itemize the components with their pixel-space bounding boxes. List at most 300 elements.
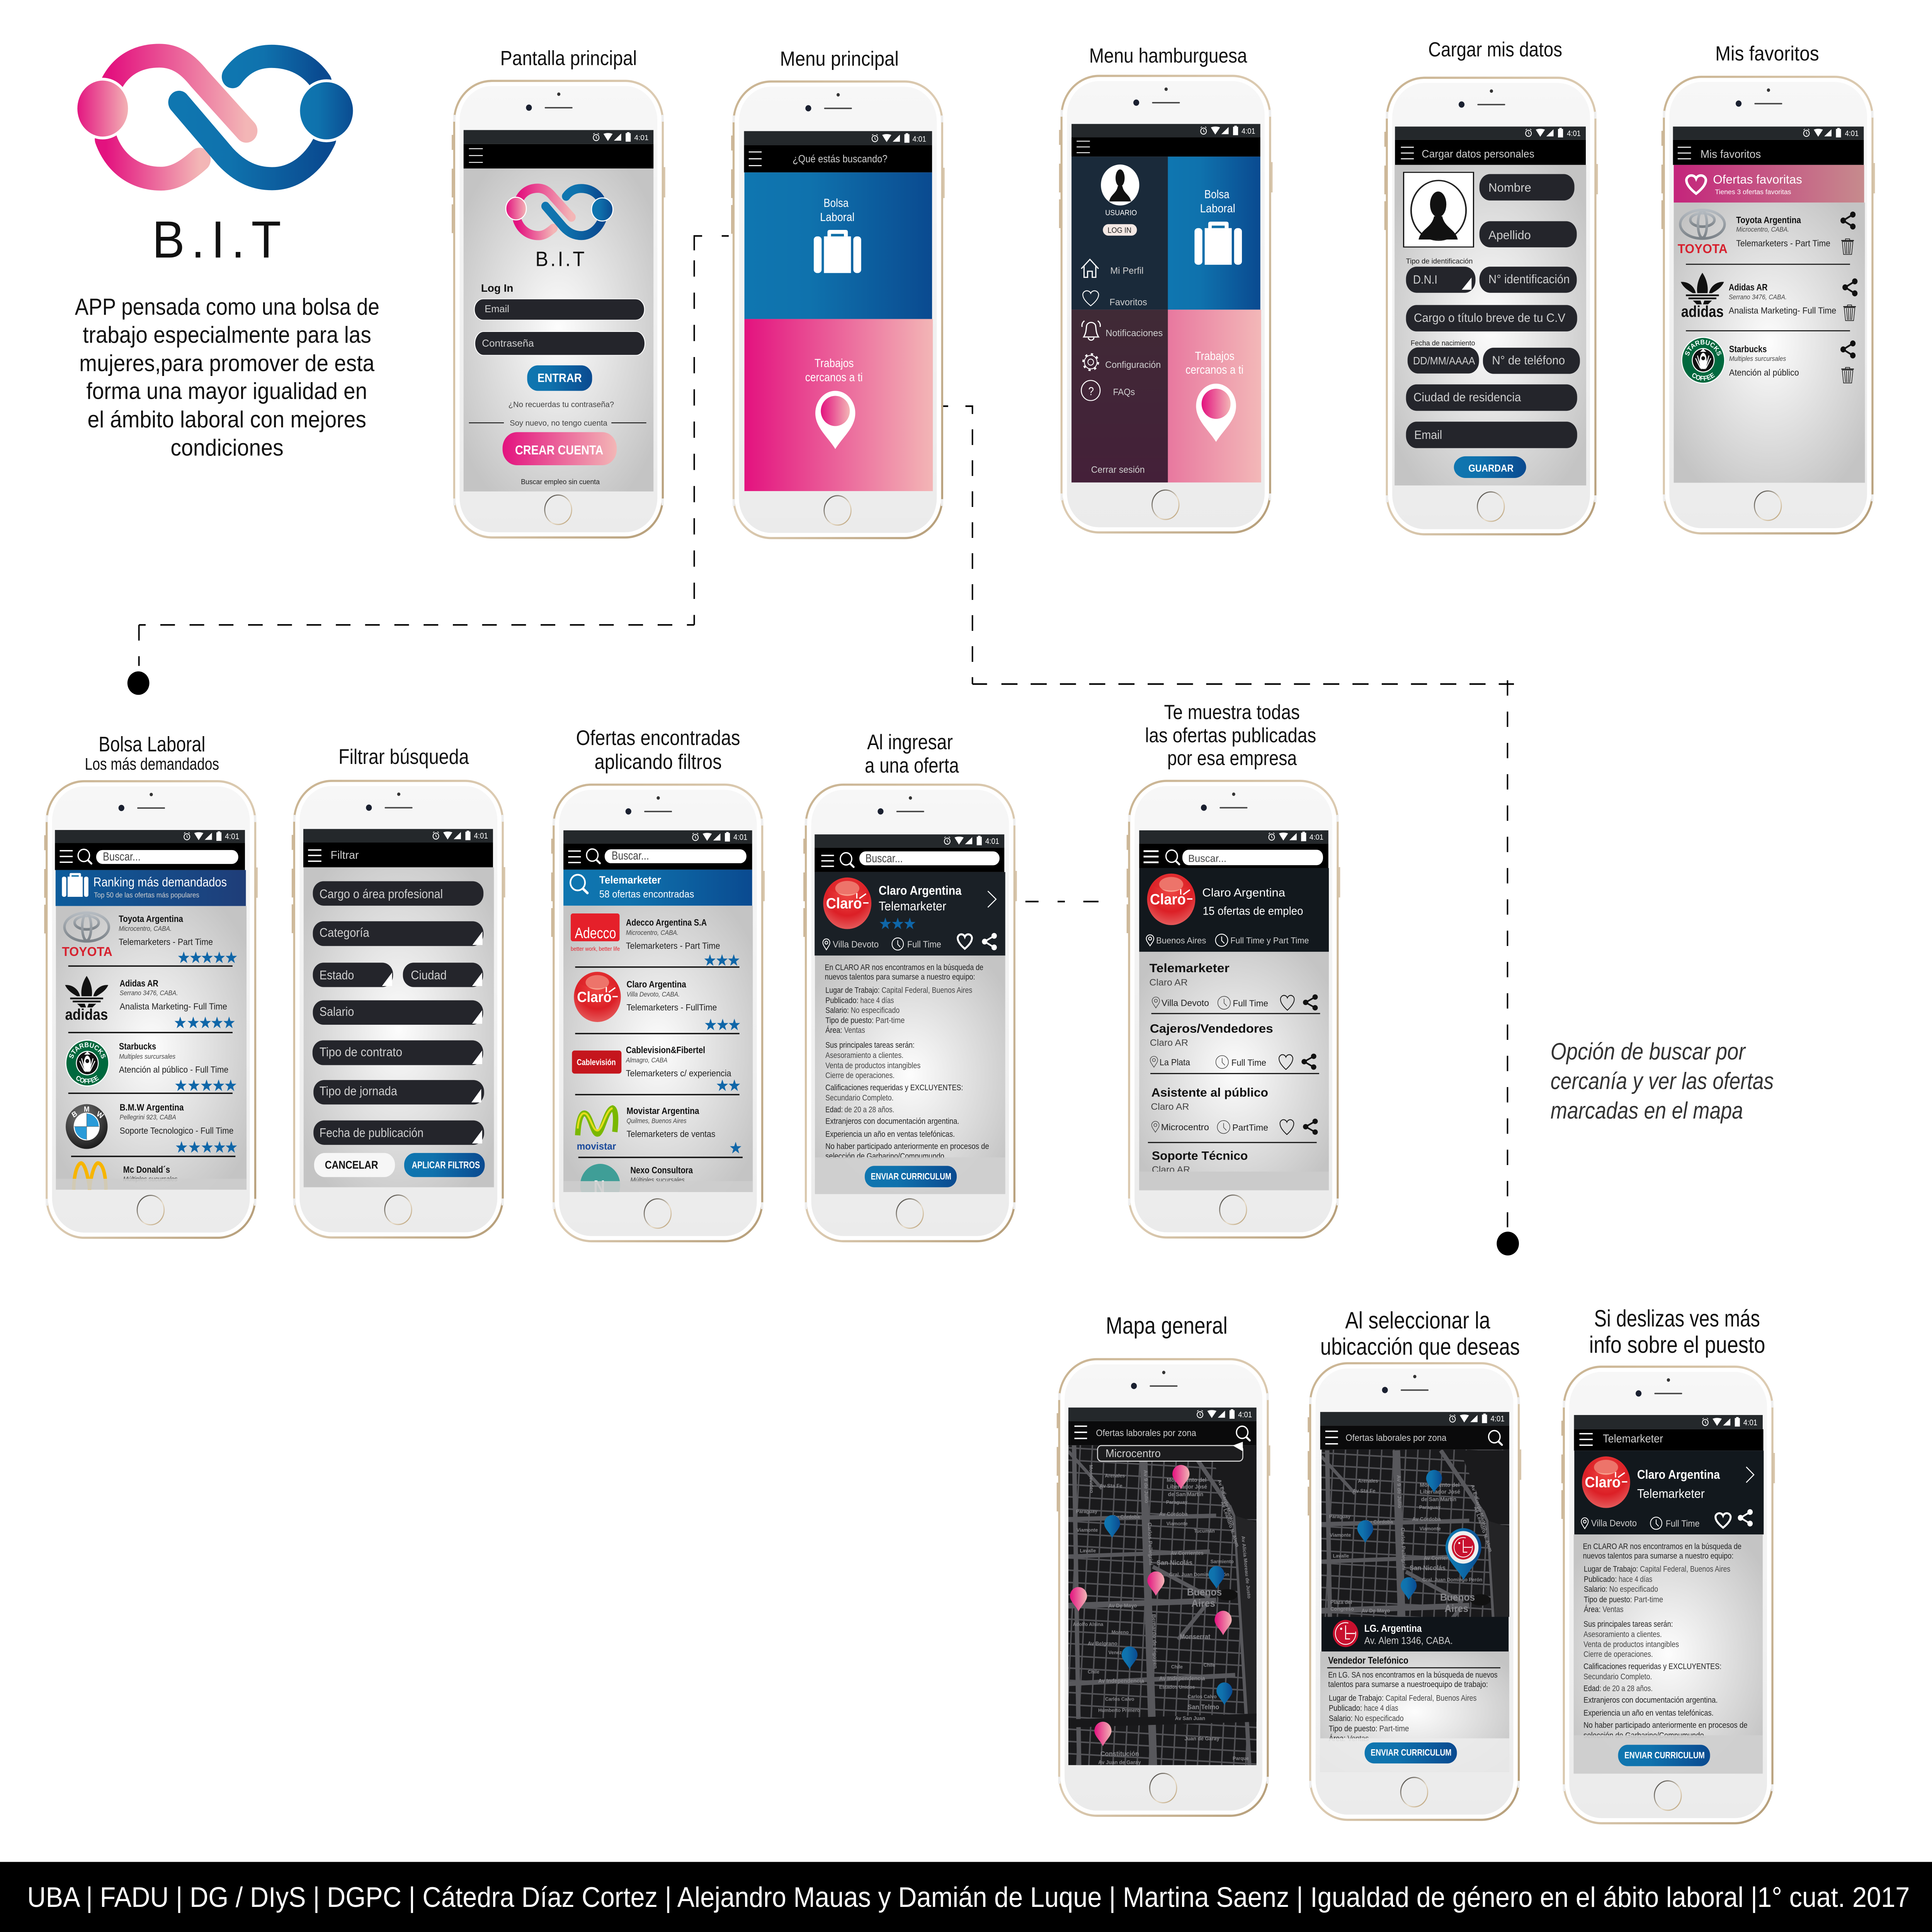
phone: Al seleccionar la ubicación: LG. Argentina <box>1364 1623 1422 1634</box>
phone: Mis favoritos: Toyota Argentina <box>1736 215 1801 225</box>
phone: Si deslizas ves más info: Extranjeros con documentación argentina. <box>1583 1696 1718 1705</box>
phone: Bolsa Laboral ranking: Ranking más demandados <box>94 875 227 889</box>
title: Ofertas encontradas: aplicando filtros <box>594 750 722 774</box>
phone: Menu hamburguesa: USUARIO <box>1105 209 1137 217</box>
phone: Al ingresar a una oferta: No haber participado anteriormente en procesos de <box>825 1142 989 1151</box>
footer bar with credits: UBA | FADU | DG / DIyS | DGPC | Cátedra Díaz Cortez | Alejandro Mauas y Damián de Luque | Martina Saenz | Igualdad de género en el ábito laboral |1° cuat. 2017 <box>27 1881 1910 1913</box>
map: microcentro streets: Adolfo Alsina <box>1073 1621 1104 1627</box>
map: microcentro streets: Aires <box>1191 1598 1215 1609</box>
intro text block: APP pensada como una bolsa de <box>75 294 379 320</box>
map: microcentro streets: Av Independencia <box>1098 1678 1145 1684</box>
phone: Al seleccionar la ubicación: Área: <box>1329 1734 1345 1743</box>
phone: Ofertas encontradas: Buscar... <box>612 849 649 862</box>
phone: Si deslizas ves más info <box>1561 1366 1775 1824</box>
phone: Bolsa Laboral ranking: B <box>70 1109 78 1119</box>
phone: Ofertas encontradas: Claro Argentina <box>626 979 686 990</box>
title: Menu principal: Menu principal <box>780 48 899 70</box>
phone: Filtrar búsqueda: CANCELAR <box>325 1158 378 1171</box>
phone: Pantalla principal: Buscar empleo sin cuenta <box>521 478 600 486</box>
arrow: dashed connector from oferta to empresa <box>1026 901 1099 903</box>
map: microcentro streets: Av Eduardo Madero <box>1217 1479 1236 1526</box>
map: zoomed area with selected LG pin: Congreso <box>1330 1606 1354 1612</box>
phone: Pantalla principal: B.I.T <box>536 247 585 270</box>
phone: Menu hamburguesa: FAQs <box>1113 387 1135 397</box>
phone: Al ingresar a una oferta: En CLARO AR nos encontramos en la búsqueda de <box>825 963 983 972</box>
phone: Al ingresar a una oferta: Publicado: <box>825 996 859 1005</box>
map: microcentro streets: Carlos Calvo <box>1105 1696 1134 1702</box>
phone: Al ingresar a una oferta: Sus principales tareas serán: <box>825 1041 915 1050</box>
phone: Pantalla principal: CREAR CUENTA <box>515 443 603 457</box>
map: microcentro streets: Libertador José <box>1167 1484 1207 1490</box>
map: microcentro streets: Paraguay <box>1076 1508 1098 1514</box>
map: zoomed area with selected LG pin: Av Leandro N. Alem <box>1473 1506 1493 1553</box>
phone: Al seleccionar la ubicación: Part-time <box>1379 1725 1409 1733</box>
title: Al seleccionar la ubicacción: Al seleccionar la <box>1345 1307 1490 1333</box>
title: Ofertas encontradas: Ofertas encontradas <box>576 726 740 750</box>
note: opción de buscar por cercanía: Opción de buscar por <box>1551 1038 1746 1065</box>
map: microcentro streets: Av Corrientes <box>1170 1550 1204 1556</box>
phone: Ofertas encontradas: Telemarketers - FullTime <box>626 1002 717 1012</box>
phone: Ofertas encontradas: Quilmes, Buenos Aires <box>626 1117 687 1125</box>
map: microcentro streets: Av San Juan <box>1175 1715 1205 1721</box>
map: microcentro streets: Moreno <box>1112 1629 1129 1635</box>
title: Al ingresar a una oferta: a una oferta <box>865 754 959 777</box>
phone: Ofertas encontradas: Cablevision&Fibertel <box>626 1045 705 1055</box>
phone: Si deslizas ves más info: Asesoramiento a clientes. <box>1583 1630 1662 1639</box>
title: Bolsa Laboral: Bolsa Laboral <box>99 733 205 756</box>
phone: Cargar mis datos: Nombre <box>1488 181 1531 195</box>
title: Filtrar búsqueda: Filtrar búsqueda <box>338 745 469 769</box>
phone: Al seleccionar la ubicación: Av. Alem 1346, CABA. <box>1364 1636 1453 1646</box>
phone: Ofertas encontradas: Claro <box>577 989 612 1005</box>
phone: Te muestra todas las ofertas de la empresa: Villa Devoto <box>1162 998 1209 1008</box>
title: Al seleccionar la ubicacción <box>1320 1307 1520 1360</box>
phone: Mis favoritos: 4:01 <box>1845 129 1859 138</box>
phone: Ofertas encontradas: Telemarketers - Part Time <box>626 941 720 951</box>
phone: Cargar mis datos: Email <box>1414 428 1442 442</box>
phone: Al seleccionar la ubicación: Ventas <box>1347 1734 1369 1743</box>
phone: Cargar mis datos: 4:01 <box>1567 129 1581 138</box>
map: zoomed area with selected LG pin: Av Sta Fe <box>1352 1488 1376 1494</box>
phone: Al seleccionar la ubicación <box>1308 1362 1521 1821</box>
map: microcentro streets: Tucumán <box>1194 1528 1215 1534</box>
map: microcentro streets: Av Córdoba <box>1159 1511 1188 1517</box>
map: microcentro streets: Av Córdoba <box>1113 1514 1140 1520</box>
phone: Si deslizas ves más info: Ventas <box>1602 1605 1624 1614</box>
phone: Bolsa Laboral ranking: TOYOTA <box>62 944 112 959</box>
phone: Menu hamburguesa <box>1059 75 1272 534</box>
phone: Si deslizas ves más info: selección de Garbarino/Compumundo. <box>1583 1731 1706 1740</box>
map: zoomed area with selected LG pin: Lavalle <box>1333 1553 1349 1559</box>
phone: Mis favoritos: Microcentro, CABA. <box>1736 226 1789 233</box>
phone: Menu hamburguesa: Favoritos <box>1109 297 1147 308</box>
map: zoomed area with selected LG pin: Av 9 de Julio <box>1396 1475 1403 1509</box>
footer bar with credits <box>0 1862 1932 1932</box>
map: microcentro streets: Av Belgrano <box>1088 1641 1117 1646</box>
phone: Cargar mis datos: Tipo de identificación <box>1406 258 1473 265</box>
phone: Filtrar búsqueda <box>292 780 505 1238</box>
map: microcentro streets: Paraguay <box>1166 1499 1188 1505</box>
phone: Te muestra todas las ofertas de la empresa: Full Time y Part Time <box>1230 936 1309 946</box>
phone: Cargar mis datos: Apellido <box>1488 228 1531 242</box>
phone: Cargar mis datos <box>1384 77 1598 536</box>
phone: Pantalla principal: Email <box>485 303 509 315</box>
phone: Ofertas encontradas: better work, better life <box>571 946 620 952</box>
intro text block: mujeres,para promover de esta <box>79 350 375 376</box>
map: zoomed area with selected LG pin: Aires <box>1444 1603 1468 1614</box>
map: zoomed area with selected LG pin: Plaza del <box>1330 1599 1352 1605</box>
phone: Ofertas encontradas: Adecco Argentina S.A <box>626 917 707 928</box>
phone: Pantalla principal: ¿No recuerdas tu contraseña? <box>509 400 614 409</box>
phone: Cargar mis datos: Ciudad de residencia <box>1413 391 1521 404</box>
phone: Ofertas encontradas: Villa Devoto, CABA. <box>626 991 680 998</box>
note: opción de buscar por cercanía: cercanía y ver las ofertas <box>1551 1067 1774 1094</box>
phone: Menu hamburguesa: Bolsa <box>1204 187 1230 201</box>
phone: Si deslizas ves más info: Salario: <box>1584 1585 1607 1594</box>
phone: Te muestra todas las ofertas de la empresa: Full Time <box>1231 1058 1266 1068</box>
phone: Bolsa Laboral ranking: W <box>95 1109 105 1121</box>
phone: Al seleccionar la ubicación: Publicado: <box>1329 1704 1362 1713</box>
phone: Al seleccionar la ubicación: 4:01 <box>1490 1415 1505 1423</box>
phone: Filtrar búsqueda: 4:01 <box>474 832 488 840</box>
map: microcentro streets: Lavalle <box>1080 1548 1096 1554</box>
phone: Filtrar búsqueda: Categoría <box>320 926 369 940</box>
phone: Menu hamburguesa: Notificaciones <box>1105 328 1163 338</box>
phone: Al seleccionar la ubicación: Lugar de Trabajo: <box>1329 1694 1384 1703</box>
phone: Cargar mis datos: GUARDAR <box>1468 463 1514 474</box>
map: microcentro streets: Av Leandro N. Alem <box>1220 1500 1240 1548</box>
map: microcentro streets: Bernardo de Irigoyen <box>1151 1614 1158 1669</box>
phone: Bolsa Laboral ranking: 4:01 <box>225 832 239 841</box>
phone: Si deslizas ves más info: Claro Argentina <box>1637 1468 1720 1481</box>
phone: Si deslizas ves más info: Claro <box>1585 1474 1621 1490</box>
map: zoomed area with selected LG pin: Buenos <box>1440 1592 1475 1603</box>
phone: Al ingresar a una oferta: Capital Federal, Buenos Aires <box>881 986 972 995</box>
phone: Bolsa Laboral ranking <box>44 780 258 1239</box>
phone: Mis favoritos <box>1662 76 1875 534</box>
phone: Ofertas encontradas <box>551 784 765 1242</box>
phone: Te muestra todas las ofertas de la empresa: La Plata <box>1160 1057 1190 1067</box>
phone: Bolsa Laboral ranking: Adidas AR <box>120 978 158 988</box>
phone: Filtrar búsqueda: APLICAR FILTROS <box>412 1160 480 1171</box>
title: Si deslizas ves más: Si deslizas ves más <box>1594 1305 1760 1332</box>
map: zoomed area with selected LG pin: Carlos Pellegrini <box>1400 1527 1407 1570</box>
phone: Mis favoritos: COFFEE <box>1690 371 1716 382</box>
phone: Menu principal: Laboral <box>820 210 854 223</box>
map: microcentro streets: Montevideo <box>1088 1465 1095 1493</box>
phone: Te muestra todas las ofertas de la empresa: 4:01 <box>1310 833 1323 841</box>
title: Te muestra todas las ofertas: las ofertas publicadas <box>1145 724 1316 747</box>
phone: Cargar mis datos: N° de teléfono <box>1492 354 1565 367</box>
title: Bolsa Laboral: Los más demandados <box>85 755 219 774</box>
phone: Bolsa Laboral ranking: adidas <box>65 1006 108 1023</box>
phone: Ofertas encontradas: Telemarketer <box>599 874 661 886</box>
title: Te muestra todas las ofertas: por esa empresa <box>1167 747 1297 769</box>
map: microcentro streets: Buenos <box>1187 1587 1222 1598</box>
map: microcentro streets: Monserrat <box>1180 1633 1211 1641</box>
map: microcentro streets: Av Juan de Garay <box>1098 1759 1141 1765</box>
phone: Menu hamburguesa: LOG IN <box>1107 226 1131 235</box>
map: zoomed area with selected LG pin: Arenales <box>1358 1478 1378 1484</box>
phone: Bolsa Laboral ranking: STARBUCKS <box>68 1041 107 1060</box>
phone: Mapa general <box>1057 1358 1270 1817</box>
phone: Al seleccionar la ubicación: No especificado <box>1354 1714 1404 1723</box>
phone: Al seleccionar la ubicación: hace 4 días <box>1364 1704 1398 1713</box>
title: Cargar mis datos: Cargar mis datos <box>1428 38 1562 61</box>
phone: Cargar mis datos: Cargar datos personales <box>1422 148 1534 160</box>
phone: Al ingresar a una oferta: 4:01 <box>985 837 999 846</box>
phone: Menu hamburguesa: Laboral <box>1200 202 1235 215</box>
intro text block <box>75 294 379 461</box>
phone: Menu hamburguesa: Cerrar sesión <box>1091 464 1145 475</box>
phone: Mapa general: Microcentro <box>1105 1447 1161 1459</box>
phone: Menu hamburguesa: 4:01 <box>1242 127 1255 136</box>
map: microcentro streets: Arenales <box>1105 1473 1125 1479</box>
phone: Si deslizas ves más info: Tipo de puesto: <box>1584 1595 1632 1604</box>
phone: Filtrar búsqueda: Tipo de jornada <box>320 1084 397 1098</box>
title: Mapa general: Mapa general <box>1106 1312 1228 1339</box>
phone: Al ingresar a una oferta: Lugar de Trabajo: <box>825 986 880 995</box>
phone: Si deslizas ves más info: nuevos talentos para sumarse a nuestro equipo: <box>1583 1552 1733 1561</box>
phone: Si deslizas ves más info: Lugar de Trabajo: <box>1584 1565 1638 1574</box>
phone: Te muestra todas las ofertas de la empresa: Claro <box>1150 891 1186 908</box>
phone: Al ingresar a una oferta: Full Time <box>907 939 941 949</box>
map: zoomed area with selected LG pin: Av De Mayo <box>1361 1608 1390 1614</box>
phone: Mis favoritos: adidas <box>1681 303 1724 320</box>
phone: Ofertas encontradas: Telemarketers c/ experiencia <box>626 1068 731 1078</box>
phone: Mis favoritos: Tienes 3 ofertas favoritas <box>1715 188 1791 196</box>
map: microcentro streets: Monumento del <box>1167 1477 1206 1483</box>
intro text block: condiciones <box>170 435 284 461</box>
phone: Al ingresar a una oferta: selección de Garbarino/Compumundo. <box>825 1152 946 1161</box>
map: microcentro streets: Av Independencia <box>1159 1675 1205 1682</box>
phone: Pantalla principal: 4:01 <box>634 134 648 142</box>
phone: Te muestra todas las ofertas de la empresa: Claro AR <box>1151 1102 1189 1112</box>
phone: Te muestra todas las ofertas de la empresa: 15 ofertas de empleo <box>1203 905 1303 917</box>
map: microcentro streets: Gral. Juan Domingo Perón <box>1169 1571 1229 1577</box>
phone: Mis favoritos: TOYOTA <box>1678 242 1728 256</box>
phone: Cargar mis datos: Fecha de nacimiento <box>1411 339 1475 347</box>
phone: Cargar mis datos: Cargo o título breve de tu C.V <box>1414 311 1565 325</box>
phone: Bolsa Laboral ranking: Multiples surcursales <box>119 1053 176 1060</box>
phone: Menu principal: Bolsa <box>823 196 849 209</box>
phone: Al seleccionar la ubicación: ENVIAR CURRICULUM <box>1371 1747 1452 1758</box>
phone: Mis favoritos: Mis favoritos <box>1701 148 1761 160</box>
phone: Mis favoritos: STARBUCKS <box>1684 338 1723 357</box>
phone: Te muestra todas las ofertas de la empresa: Buscar... <box>1188 853 1226 864</box>
phone: Te muestra todas las ofertas de la empresa: Soporte Técnico <box>1152 1149 1248 1162</box>
phone: Menu principal: cercanos a ti <box>805 371 863 384</box>
phone: Mis favoritos: Multiples surcursales <box>1729 355 1786 363</box>
map: microcentro streets: Viamonte <box>1077 1527 1098 1533</box>
phone: Mis favoritos: Starbucks <box>1729 344 1767 354</box>
phone: Si deslizas ves más info: Edad: <box>1583 1684 1601 1693</box>
phone: Si deslizas ves más info: Telemarketer <box>1603 1432 1663 1445</box>
phone: Al ingresar a una oferta: Calificaciones requeridas y EXCLUYENTES: <box>825 1083 963 1092</box>
phone: Ofertas encontradas: Nexo Consultora <box>630 1165 693 1175</box>
phone: Te muestra todas las ofertas de la empresa <box>1127 780 1340 1238</box>
phone: Bolsa Laboral ranking: Telemarketers - Part Time <box>119 937 213 947</box>
title: Al ingresar a una oferta: Al ingresar <box>867 730 953 754</box>
phone: Si deslizas ves más info: Publicado: <box>1584 1575 1617 1584</box>
phone: Menu hamburguesa: cercanos a ti <box>1185 363 1243 376</box>
phone: Si deslizas ves más info: No haber participado anteriormente en procesos de <box>1583 1721 1747 1730</box>
phone: Si deslizas ves más info: Telemarketer <box>1637 1486 1705 1501</box>
phone: Mis favoritos: Atención al público <box>1729 368 1799 378</box>
phone: Al ingresar a una oferta: Área: <box>825 1026 842 1035</box>
map: zoomed area with selected LG pin: Av Eduardo Madero <box>1470 1484 1489 1531</box>
phone: Al ingresar a una oferta: Extranjeros con documentación argentina. <box>825 1117 959 1126</box>
phone: Al ingresar a una oferta: Salario: <box>825 1006 849 1015</box>
phone: Si deslizas ves más info: Full Time <box>1666 1518 1700 1529</box>
phone: Te muestra todas las ofertas de la empresa: Full Time <box>1233 998 1268 1009</box>
map: zoomed area with selected LG pin: Viamonte <box>1420 1526 1441 1532</box>
phone: Si deslizas ves más info: Villa Devoto <box>1591 1518 1637 1528</box>
phone: Al ingresar a una oferta: Venta de productos intangibles <box>825 1061 920 1070</box>
phone: Al ingresar a una oferta <box>803 784 1017 1242</box>
map: microcentro streets: Chile <box>1171 1664 1183 1670</box>
phone: Ofertas encontradas: Múltiples sucursales <box>630 1176 685 1184</box>
map: microcentro streets: San Telmo <box>1188 1703 1219 1711</box>
title: Si deslizas ves más <box>1589 1305 1765 1358</box>
phone: Si deslizas ves más info: Secundario Completo. <box>1583 1672 1652 1681</box>
title: Al seleccionar la ubicacción: ubicacción que deseas <box>1320 1333 1520 1360</box>
phone: Ofertas encontradas: Movistar Argentina <box>626 1105 699 1116</box>
phone: Al ingresar a una oferta: Telemarketer <box>879 899 946 913</box>
phone: Bolsa Laboral ranking: B.M.W Argentina <box>120 1102 184 1112</box>
phone: Te muestra todas las ofertas de la empresa: Claro AR <box>1152 1165 1190 1175</box>
phone: Filtrar búsqueda: Fecha de publicación <box>320 1126 423 1140</box>
title: Menu hamburguesa: Menu hamburguesa <box>1089 44 1247 67</box>
phone: Pantalla principal: ENTRAR <box>537 371 582 384</box>
map: zoomed area with selected LG pin: Monumento del <box>1420 1482 1459 1488</box>
phone: Cargar mis datos: D.N.I <box>1413 273 1437 286</box>
map: microcentro streets: Estados Unidos <box>1159 1684 1195 1690</box>
title: Mis favoritos: Mis favoritos <box>1715 42 1819 65</box>
phone: Mis favoritos: Telemarketers - Part Time <box>1736 239 1830 248</box>
map: microcentro streets: Venez <box>1108 1650 1122 1655</box>
phone: Te muestra todas las ofertas de la empresa: Claro AR <box>1150 1038 1188 1048</box>
title: Te muestra todas las ofertas <box>1145 701 1316 769</box>
phone: Si deslizas ves más info: Sus principales tareas serán: <box>1583 1620 1673 1629</box>
title: Si deslizas ves más: info sobre el puesto <box>1589 1331 1765 1358</box>
map: microcentro streets: Carlos Calvo <box>1188 1694 1217 1699</box>
map: microcentro streets: Chile <box>1088 1669 1099 1675</box>
title: Ofertas encontradas <box>576 726 740 774</box>
map: microcentro streets: Carlos Pellegrini <box>1147 1522 1154 1565</box>
phone: Ofertas encontradas: Microcentro, CABA. <box>626 929 679 936</box>
phone: Ofertas encontradas: movistar <box>577 1141 616 1152</box>
phone: Al ingresar a una oferta: No especificado <box>851 1006 900 1015</box>
phone: Bolsa Laboral ranking: Serrano 3476, CABA. <box>120 989 178 997</box>
map: microcentro streets: Parque <box>1233 1755 1249 1761</box>
phone: Bolsa Laboral ranking: Pellegrini 923, CABA <box>120 1113 176 1121</box>
phone: Bolsa Laboral ranking: Múltiples sucursales <box>123 1175 178 1183</box>
phone: Mis favoritos: Analista Marketing- Full Time <box>1729 306 1836 316</box>
phone: Si deslizas ves más info: No especificado <box>1609 1585 1658 1594</box>
phone: Al ingresar a una oferta: Villa Devoto <box>833 939 879 949</box>
map: zoomed area with selected LG pin: Viamonte <box>1330 1532 1351 1538</box>
map: microcentro streets: de San Martín <box>1168 1491 1203 1498</box>
phone: Ofertas encontradas: 58 ofertas encontradas <box>599 889 694 900</box>
phone: Bolsa Laboral ranking: Soporte Tecnologico - Full Time <box>120 1126 233 1136</box>
map: microcentro streets: Chile <box>1204 1662 1215 1668</box>
phone: Menu hamburguesa: Configuración <box>1105 360 1161 370</box>
phone: Al seleccionar la ubicación: Vendedor Telefónico <box>1328 1655 1408 1666</box>
phone: Si deslizas ves más info: Calificaciones requeridas y EXCLUYENTES: <box>1583 1662 1721 1671</box>
title: Pantalla principal: Pantalla principal <box>500 47 637 70</box>
phone: Menu principal: Trabajos <box>815 356 854 370</box>
phone: Si deslizas ves más info: En CLARO AR nos encontramos en la búsqueda de <box>1583 1542 1742 1551</box>
phone: Si deslizas ves más info: hace 4 días <box>1619 1575 1652 1584</box>
map: microcentro streets: Juan de Garay <box>1184 1736 1219 1742</box>
phone: Si deslizas ves más info: Part-time <box>1634 1595 1663 1604</box>
phone: Si deslizas ves más info: Capital Federal, Buenos Aires <box>1640 1565 1730 1574</box>
phone: Al ingresar a una oferta: Edad: <box>825 1105 843 1114</box>
map: zoomed area with selected LG pin: Av Corrientes <box>1423 1555 1457 1561</box>
brand logo: B.I.T infinity symbol <box>76 56 354 179</box>
phone: Al ingresar a una oferta: ENVIAR CURRICULUM <box>871 1171 951 1182</box>
title: Bolsa Laboral <box>85 733 219 774</box>
arrow: dashed connector from menu principal to bolsa laboral <box>128 236 729 695</box>
phone: Pantalla principal: Soy nuevo, no tengo cuenta <box>510 418 607 427</box>
phone: Bolsa Laboral ranking: Mc Donald´s <box>123 1164 170 1175</box>
phone: Ofertas encontradas: 4:01 <box>733 833 747 842</box>
phone: Al ingresar a una oferta: Secundario Completo. <box>825 1094 894 1102</box>
phone: Al ingresar a una oferta: Claro Argentina <box>879 884 962 898</box>
phone: Al ingresar a una oferta: Asesoramiento a clientes. <box>825 1051 903 1060</box>
phone: Bolsa Laboral ranking: Buscar... <box>103 850 141 863</box>
phone: Bolsa Laboral ranking: COFFEE <box>75 1074 100 1085</box>
phone: Filtrar búsqueda: Cargo o área profesional <box>320 887 443 901</box>
phone: Ofertas encontradas: Telemarketers de ventas <box>626 1129 715 1139</box>
phone: Te muestra todas las ofertas de la empresa: Cajeros/Vendedores <box>1150 1022 1273 1035</box>
phone: Ofertas encontradas: Cablevisión <box>577 1058 616 1067</box>
phone: Mapa general: 4:01 <box>1238 1411 1252 1419</box>
phone: Al ingresar a una oferta: Experiencia un año en ventas telefónicas. <box>825 1130 955 1139</box>
phone: Mis favoritos: Adidas AR <box>1729 282 1767 293</box>
note: opción de buscar por cercanía <box>1551 1038 1774 1124</box>
map: zoomed area with selected LG pin <box>1321 1450 1509 1617</box>
phone: Bolsa Laboral ranking: Toyota Argentina <box>119 913 183 924</box>
phone: Te muestra todas las ofertas de la empresa: Microcentro <box>1161 1122 1209 1132</box>
phone: Al ingresar a una oferta: Cierre de operaciones. <box>825 1071 895 1080</box>
phone: Al seleccionar la ubicación: Tipo de puesto: <box>1329 1725 1377 1733</box>
map: microcentro streets: Av Sta Fe <box>1099 1483 1122 1489</box>
map: zoomed area with selected LG pin: Paraguay <box>1419 1504 1441 1510</box>
phone: Al seleccionar la ubicación: talentos para sumarse a nuestroequipo de trabajo: <box>1328 1680 1488 1689</box>
phone: Al ingresar a una oferta: Ventas <box>844 1026 865 1035</box>
phone: Menu principal: ¿Qué estás buscando? <box>793 153 888 165</box>
phone: Al seleccionar la ubicación: En LG. SA nos encontramos en la búsqueda de nuevos <box>1328 1671 1498 1680</box>
phone: Si deslizas ves más info: Cierre de operaciones. <box>1583 1650 1653 1659</box>
phone: Al ingresar a una oferta: Part-time <box>876 1016 905 1025</box>
phone: Al ingresar a una oferta: nuevos talentos para sumarse a nuestro equipo: <box>825 973 975 981</box>
phone: Si deslizas ves más info: 4:01 <box>1743 1418 1757 1427</box>
phone: Filtrar búsqueda: Estado <box>320 968 354 982</box>
phone: Menu principal: 4:01 <box>912 134 926 143</box>
phone: Bolsa Laboral ranking: Atención al público - Full Time <box>119 1065 228 1075</box>
phone: Al ingresar a una oferta: de 20 a 28 años. <box>844 1105 894 1114</box>
map: zoomed area with selected LG pin: San Nicolás <box>1410 1564 1446 1571</box>
phone: Te muestra todas las ofertas de la empresa: Claro AR <box>1150 977 1188 988</box>
phone: Bolsa Laboral ranking: Top 50 de las ofertas más populares <box>94 891 199 899</box>
map: microcentro streets: Viamonte <box>1167 1520 1188 1526</box>
intro text block: forma una mayor igualidad en <box>86 378 367 404</box>
phone: Bolsa Laboral ranking: Starbucks <box>119 1041 156 1051</box>
phone: Te muestra todas las ofertas de la empresa: Telemarketer <box>1150 961 1230 975</box>
map: microcentro streets: Av Alicia Moreau de Justo <box>1240 1536 1252 1599</box>
